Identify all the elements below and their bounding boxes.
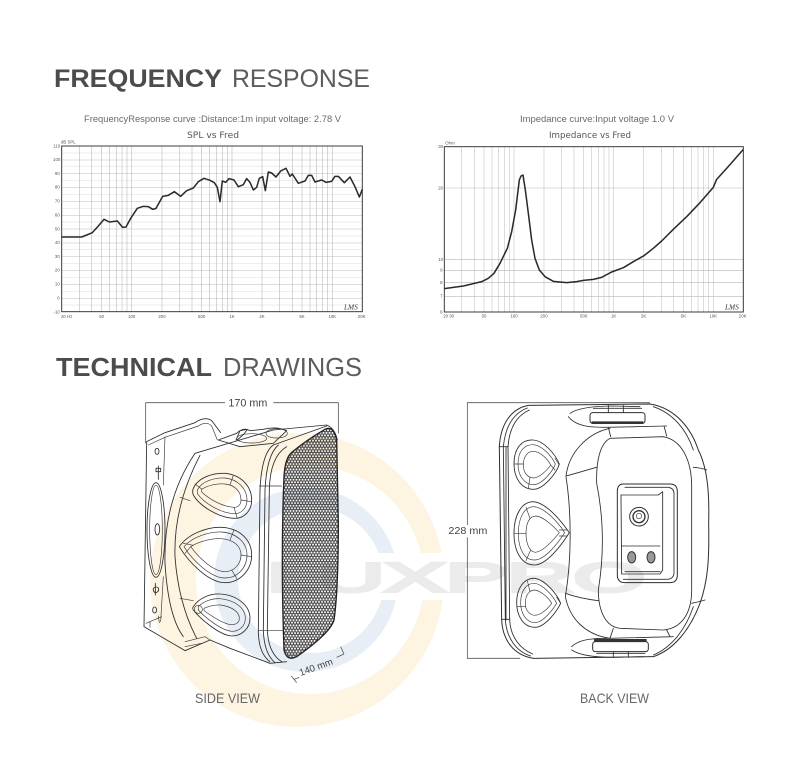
line chart: SPL curve: 20 <box>55 268 60 273</box>
line chart: SPL curve: 2K <box>259 314 265 319</box>
line chart: impedance curve: 10 <box>438 257 444 262</box>
label: back view: BACK VIEW <box>580 690 650 706</box>
line chart: SPL curve: 50 <box>99 314 105 319</box>
line chart: SPL curve: 40 <box>55 240 60 245</box>
line chart: SPL curve: 100 <box>128 314 136 319</box>
line chart: SPL curve: 60 <box>55 212 60 217</box>
line chart: SPL curve: -10 <box>54 309 60 314</box>
line chart: SPL curve: 50 <box>55 226 60 231</box>
heading: technical drawings <box>56 352 362 382</box>
line chart: SPL curve: 20K <box>358 314 366 319</box>
housing outline <box>499 404 709 658</box>
line chart: impedance curve: 1K <box>611 314 616 319</box>
speaker grille <box>282 428 338 658</box>
heading: frequency response: FREQUENCY <box>54 65 222 93</box>
dimension: 140 mm depth <box>291 647 344 683</box>
chart title: frequency response: FrequencyResponse curve :Distance:1m input voltage: 2.78 V <box>84 114 342 125</box>
dimension: 170 mm width: 170 mm <box>228 398 267 410</box>
watermark: wordmark: LUXPRO <box>267 554 645 600</box>
dimension: 170 mm width <box>146 398 338 443</box>
line chart: impedance curve: 20 30 <box>443 314 455 319</box>
dimension: 228 mm height: 228 mm <box>448 526 487 537</box>
watermark: LUXPRO rings and wordmark <box>150 433 652 727</box>
handle recess: bottom <box>517 578 561 627</box>
line chart: impedance curve: 2K <box>641 314 646 319</box>
mounting bolt <box>630 507 648 526</box>
wall bracket <box>144 419 221 651</box>
rear panel <box>597 437 692 630</box>
top mounting bracket <box>568 405 667 437</box>
line chart: impedance curve: 500 <box>580 314 588 319</box>
line chart: impedance curve: 50 <box>482 314 487 319</box>
line chart: impedance curve: 20 <box>438 185 444 190</box>
line chart: SPL curve: 70 <box>55 199 60 204</box>
line chart: SPL curve: 200 <box>158 314 166 319</box>
line chart: impedance curve: Ohm <box>445 140 455 145</box>
chart title: impedance curve: Impedance curve:Input voltage 1.0 V <box>520 114 675 125</box>
heading: technical drawings: TECHNICAL <box>56 352 212 382</box>
side handle recess: bottom <box>193 594 250 636</box>
line chart: impedance curve: 20K <box>739 314 747 319</box>
chart subtitle: impedance vs Fred: Impedance vs Fred <box>549 131 631 141</box>
line chart: SPL curve: 90 <box>55 171 60 176</box>
line chart: impedance curve <box>438 140 747 319</box>
line chart: impedance curve: 7 <box>440 294 443 299</box>
line chart: impedance curve: 100 <box>510 314 518 319</box>
line chart: SPL curve: 5K <box>299 314 305 319</box>
dimension: 228 mm height <box>448 403 650 658</box>
line chart: impedance curve: 8 <box>440 280 443 285</box>
top mounting knob <box>218 428 287 447</box>
watermark: yellow ring <box>150 433 444 727</box>
line chart: impedance curve: 30 <box>438 144 444 149</box>
handle recess: top <box>514 440 559 489</box>
line chart: impedance curve: 10K <box>709 314 717 319</box>
side handle recess: top <box>193 473 252 518</box>
heading: frequency response <box>54 65 370 93</box>
heading: technical drawings: DRAWINGS <box>223 352 362 382</box>
line chart: impedance curve: 5K <box>681 314 686 319</box>
line chart: SPL curve: 110 <box>53 143 61 148</box>
line chart: SPL curve: 10K <box>328 314 336 319</box>
line chart: SPL curve: 80 <box>55 185 60 190</box>
panel: impedance chart <box>438 114 747 319</box>
line chart: SPL curve: 500 <box>198 314 206 319</box>
line chart: impedance curve: 6 <box>440 309 443 314</box>
line chart: impedance curve: 9 <box>440 268 443 273</box>
line chart: SPL curve: 30 <box>55 254 60 259</box>
terminal plate <box>617 484 677 583</box>
heading: frequency response: RESPONSE <box>232 65 370 93</box>
line chart: SPL curve: 1K <box>229 314 235 319</box>
line chart: SPL curve: dB SPL <box>61 140 76 145</box>
label: side view: SIDE VIEW <box>195 690 261 706</box>
handle recess: middle <box>514 502 569 565</box>
dimension: 140 mm depth: 140 mm <box>298 657 334 679</box>
drawing: speaker side view <box>144 398 344 683</box>
line chart: SPL curve: LMS <box>343 302 358 311</box>
line chart: SPL curve: 20 Hz <box>61 314 72 319</box>
line chart: SPL curve: 0 <box>57 295 60 300</box>
speaker body outline <box>165 425 337 663</box>
side handle recess: middle <box>179 527 252 583</box>
line chart: impedance curve: 200 <box>540 314 548 319</box>
watermark: blue ring <box>214 488 398 672</box>
chart subtitle: SPL vs Fred: SPL vs Fred <box>187 131 239 141</box>
line chart: SPL curve <box>53 140 366 319</box>
drawing: speaker back view <box>448 403 709 658</box>
bottom mounting bracket <box>572 628 673 657</box>
line chart: impedance curve: LMS <box>724 302 739 311</box>
line chart: SPL curve: 10 <box>55 282 60 287</box>
input terminals <box>628 552 655 563</box>
panel: SPL frequency response chart <box>53 114 366 319</box>
line chart: SPL curve: 100 <box>53 157 61 162</box>
